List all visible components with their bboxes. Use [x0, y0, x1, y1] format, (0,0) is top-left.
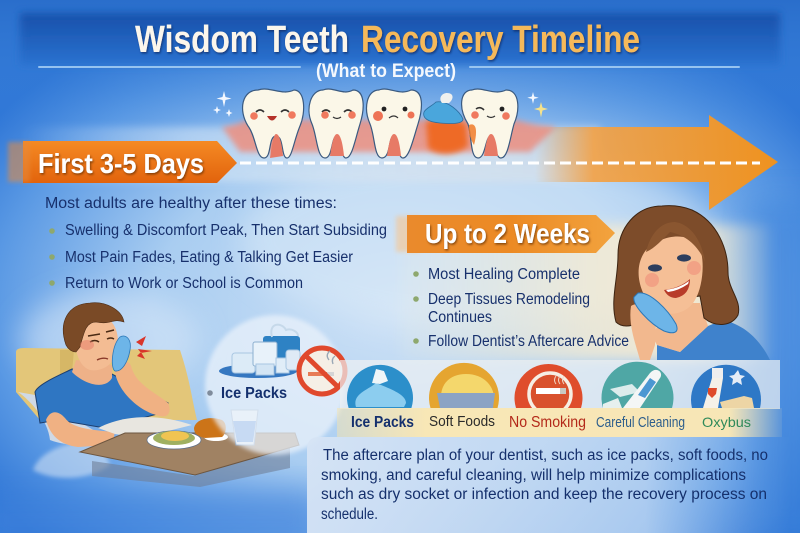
gums	[222, 120, 556, 152]
chest and neck	[652, 303, 708, 352]
tooth 2	[309, 89, 363, 158]
blanket	[98, 417, 192, 438]
title: Wisdom Teeth	[135, 19, 349, 61]
list: two weeks	[413, 266, 629, 350]
care labels	[351, 413, 751, 431]
title	[135, 19, 640, 61]
timeline arrow	[20, 115, 778, 210]
care labels: Oxybus	[702, 414, 751, 430]
icon: no smoking	[514, 364, 582, 415]
ice packs bubble: Ice Packs	[221, 385, 287, 402]
table legs	[92, 446, 290, 487]
paragraph panel: schedule.	[321, 506, 378, 523]
title band	[20, 13, 780, 68]
heading: Most adults are healthy after these times:	[45, 195, 337, 212]
blush	[645, 273, 659, 287]
eyes	[648, 264, 662, 272]
mouth	[664, 279, 690, 298]
ice pack	[424, 93, 463, 124]
paragraph panel: smoking, and careful cleaning, will help minimize complications	[321, 467, 746, 484]
icon: careful cleaning	[602, 362, 674, 408]
teeth illustration	[213, 89, 556, 158]
inflamed gum	[426, 118, 468, 154]
banner: Up to 2 Weeks: Up to 2 Weeks	[425, 218, 590, 249]
plate	[147, 431, 201, 449]
hand	[630, 304, 656, 360]
fringe	[646, 222, 705, 262]
ice packs bubble	[205, 315, 345, 455]
shirt	[657, 320, 770, 360]
paragraph panel: such as dry socket or infection and keep the recovery process on	[321, 486, 767, 503]
ice pack	[112, 336, 130, 371]
tooth 1	[243, 89, 304, 158]
bullet and label	[207, 390, 213, 396]
care labels: Careful Cleaning	[596, 415, 685, 431]
list: two weeks: Continues	[428, 309, 492, 326]
roll	[204, 433, 228, 441]
shirt	[35, 369, 168, 428]
neck	[72, 360, 112, 385]
pain marks	[136, 336, 152, 359]
illustration: woman with ice pack	[614, 206, 770, 360]
banner: First 3-5 Days	[8, 141, 237, 183]
text block: healthy after these times	[45, 195, 387, 292]
tooth 4	[462, 89, 518, 158]
face	[88, 330, 114, 342]
arm on lap	[46, 412, 115, 447]
list: Most Pain Fades, Eating & Talking Get Easier	[65, 249, 353, 266]
list: Return to Work or School is Common	[65, 275, 303, 292]
list: Swelling & Discomfort Peak, Then Start Subsiding	[65, 222, 387, 239]
list: two weeks: Most Healing Complete	[428, 266, 580, 283]
subtitle: (What to Expect)	[316, 61, 456, 82]
table	[80, 433, 299, 475]
care labels: Soft Foods	[429, 413, 495, 430]
care strip	[337, 360, 782, 437]
head	[75, 313, 118, 370]
title: Recovery Timeline	[361, 19, 640, 61]
tooth 3	[367, 89, 421, 158]
list: two weeks: Deep Tissues Remodeling	[428, 291, 590, 308]
care labels: No Smoking	[509, 414, 586, 431]
list	[49, 222, 387, 292]
label strip	[337, 408, 782, 437]
paragraph panel	[307, 437, 790, 533]
glass	[231, 410, 258, 445]
hair	[614, 206, 739, 326]
list: two weeks: Follow Dentist’s Aftercare Advice	[428, 333, 629, 350]
care background	[340, 360, 780, 409]
hair	[63, 303, 124, 352]
forearm and hand	[115, 362, 170, 416]
care labels: Ice Packs	[351, 414, 414, 431]
cream panel behind second stage	[400, 225, 770, 360]
ice bag	[263, 336, 300, 364]
sparkles	[213, 91, 548, 118]
sheet	[18, 392, 110, 445]
headboard	[16, 348, 197, 420]
banner: First 3-5 Days: First 3-5 Days	[38, 148, 204, 179]
icon: soft foods	[429, 363, 499, 408]
ice pack	[634, 293, 677, 333]
paragraph panel: The aftercare plan of your dentist, such as ice packs, soft foods, no	[323, 447, 768, 464]
icon: ice pack	[347, 365, 413, 408]
illustration: man in bed	[16, 303, 299, 487]
icon: no smoking sign	[299, 348, 345, 394]
icon: aftercare kit	[691, 365, 761, 408]
ice cubes	[232, 353, 255, 373]
face	[639, 236, 703, 314]
